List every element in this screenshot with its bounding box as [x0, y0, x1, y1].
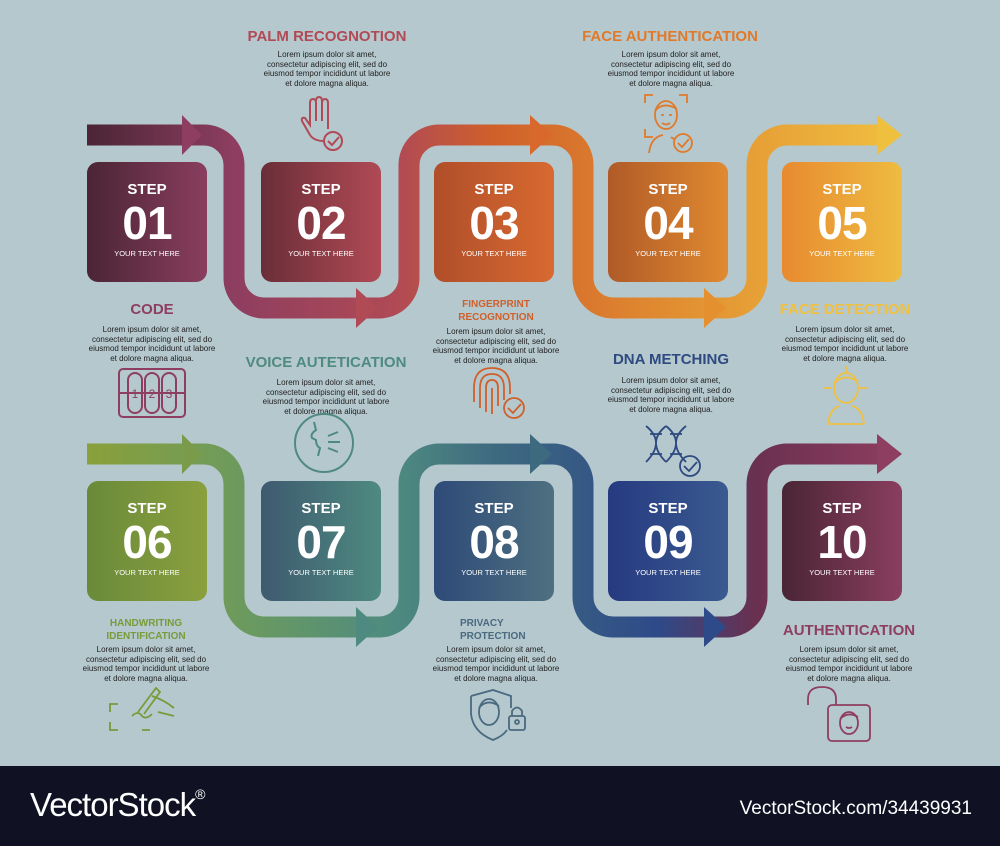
step 07: 07: [296, 516, 346, 568]
text: authentication: [786, 645, 912, 682]
icon: code lock: 1: [132, 387, 139, 401]
text: handwriting: [83, 645, 209, 682]
step 08: [434, 481, 554, 601]
step 04: YOUR TEXT HERE: [635, 249, 701, 258]
step 07: STEP: [301, 500, 341, 517]
text: privacy: eiusmod tempor incididunt ut labore: [433, 664, 559, 673]
icon: dna: [645, 425, 701, 477]
text: face detection: eiusmod tempor incididunt ut labore: [782, 344, 908, 353]
step 10: YOUR TEXT HERE: [809, 568, 875, 577]
step 05: [782, 162, 902, 282]
step 06: [87, 481, 207, 601]
heading: privacy protection: PROTECTION: [460, 631, 526, 642]
text: code: [89, 325, 215, 362]
text: face authentication: consectetur adipiscing elit, sed do: [611, 60, 731, 68]
step 04: STEP: [648, 181, 688, 198]
heading: fingerprint recognotion: RECOGNOTION: [458, 312, 534, 323]
arrow row 2: [87, 434, 902, 647]
step 07: YOUR TEXT HERE: [288, 568, 354, 577]
step 08: 08: [469, 516, 519, 568]
step 03: [434, 162, 554, 282]
step 10: 10: [817, 516, 867, 568]
text: privacy: et dolore magna aliqua.: [454, 674, 538, 682]
step 09: 09: [643, 516, 693, 568]
step 03: 03: [469, 197, 519, 249]
icon: code lock: 3: [166, 387, 173, 401]
step 05: STEP: [822, 181, 862, 198]
text: face detection: Lorem ipsum dolor sit amet,: [796, 325, 894, 334]
step 05: YOUR TEXT HERE: [809, 249, 875, 258]
step 08: STEP: [474, 500, 514, 517]
icon: unlock: [807, 686, 871, 742]
text: face authentication: eiusmod tempor incididunt ut labore: [608, 69, 734, 78]
heading: code: CODE: [130, 301, 174, 318]
text: palm: consectetur adipiscing elit, sed do: [267, 60, 387, 68]
step 10: STEP: [822, 500, 862, 517]
text: palm: et dolore magna aliqua.: [285, 78, 369, 88]
text: fingerprint: eiusmod tempor incididunt ut labore: [433, 346, 559, 355]
text: code: eiusmod tempor incididunt ut labore: [89, 344, 215, 353]
text: privacy: consectetur adipiscing elit, sed do: [436, 654, 556, 664]
text: palm: Lorem ipsum dolor sit amet,: [278, 50, 376, 59]
text: fingerprint: et dolore magna aliqua.: [454, 356, 538, 364]
step 03: STEP: [474, 181, 514, 198]
step 10: [782, 481, 902, 601]
text: code: Lorem ipsum dolor sit amet,: [103, 325, 201, 334]
step 04: [608, 162, 728, 282]
text: privacy: [433, 645, 559, 682]
step 09: [608, 481, 728, 601]
text: authentication: et dolore magna aliqua.: [807, 674, 891, 682]
text: authentication: consectetur adipiscing elit, sed do: [789, 654, 909, 664]
icon: face authentication: [644, 94, 693, 154]
heading: fingerprint recognotion: [458, 299, 534, 323]
arrow row 1: [87, 115, 902, 328]
text: face detection: [782, 325, 908, 362]
heading: face authentication: FACE AUTHENTICATION: [582, 28, 758, 45]
text: face detection: et dolore magna aliqua.: [803, 354, 887, 362]
text: face authentication: et dolore magna aliqua.: [629, 78, 713, 88]
heading: face detection: FACE DETECTION: [780, 301, 910, 318]
text: voice: consectetur adipiscing elit, sed do: [266, 388, 386, 396]
icon: voice: [294, 413, 354, 473]
heading: fingerprint recognotion: FINGERPRINT: [462, 299, 530, 310]
text: palm: eiusmod tempor incididunt ut labore: [264, 69, 390, 78]
text: code: et dolore magna aliqua.: [110, 354, 194, 362]
text: voice: [263, 378, 389, 416]
text: face detection: consectetur adipiscing elit, sed do: [785, 334, 905, 344]
footer brand: VectorStock®: [30, 786, 204, 823]
text: authentication: eiusmod tempor incididunt ut labore: [786, 664, 912, 673]
heading: dna metching: DNA METCHING: [613, 351, 729, 368]
text: dna: et dolore magna aliqua.: [629, 404, 713, 414]
step 08: YOUR TEXT HERE: [461, 568, 527, 577]
icon: code lock: 2: [149, 387, 156, 401]
step 02: YOUR TEXT HERE: [288, 249, 354, 258]
heading: voice autetication: VOICE AUTETICATION: [246, 354, 406, 371]
text: voice: eiusmod tempor incididunt ut labore: [263, 397, 389, 406]
icon: privacy: [470, 689, 526, 741]
step 01: YOUR TEXT HERE: [114, 249, 180, 258]
text: code: consectetur adipiscing elit, sed do: [92, 334, 212, 344]
step 04: 04: [643, 197, 693, 249]
heading: handwriting identification: [106, 618, 186, 642]
icon: fingerprint: [473, 367, 525, 419]
step 01: STEP: [127, 181, 167, 198]
footer url: VectorStock.com/34439931: [740, 798, 972, 819]
text: handwriting: Lorem ipsum dolor sit amet,: [97, 645, 195, 654]
text: voice: et dolore magna aliqua.: [284, 406, 368, 416]
text: voice: Lorem ipsum dolor sit amet,: [277, 378, 375, 387]
text: handwriting: et dolore magna aliqua.: [104, 674, 188, 682]
heading: privacy protection: [460, 618, 526, 642]
step 05: 05: [817, 197, 867, 249]
heading: privacy protection: PRIVACY: [460, 618, 504, 629]
footer bar: [0, 766, 1000, 846]
text: privacy: Lorem ipsum dolor sit amet,: [447, 645, 545, 654]
heading: handwriting identification: HANDWRITING: [110, 618, 182, 629]
text: dna: [608, 376, 734, 414]
step 07: [261, 481, 381, 601]
step 06: YOUR TEXT HERE: [114, 568, 180, 577]
step 02: 02: [296, 197, 346, 249]
icon: face detection: [824, 366, 868, 425]
step 06: 06: [122, 516, 172, 568]
text: dna: eiusmod tempor incididunt ut labore: [608, 395, 734, 404]
text: palm: [264, 50, 390, 88]
step 01: [87, 162, 207, 282]
text: face authentication: Lorem ipsum dolor sit amet,: [622, 50, 720, 59]
heading: authentication: AUTHENTICATION: [783, 622, 915, 639]
step 09: STEP: [648, 500, 688, 517]
step 06: STEP: [127, 500, 167, 517]
heading: palm recognotion: PALM RECOGNOTION: [248, 28, 406, 45]
text: authentication: Lorem ipsum dolor sit amet,: [800, 645, 898, 654]
step 03: YOUR TEXT HERE: [461, 249, 527, 258]
step 02: STEP: [301, 181, 341, 198]
icon: code lock: [118, 368, 186, 418]
text: fingerprint: [433, 327, 559, 364]
icon: handwriting: [109, 686, 174, 731]
heading: handwriting identification: IDENTIFICATION: [106, 631, 186, 642]
text: fingerprint: Lorem ipsum dolor sit amet,: [447, 327, 545, 336]
icon: palm: [300, 96, 343, 151]
text: face authentication: [608, 50, 734, 88]
step 09: YOUR TEXT HERE: [635, 568, 701, 577]
text: dna: Lorem ipsum dolor sit amet,: [622, 376, 720, 385]
step 02: [261, 162, 381, 282]
text: dna: consectetur adipiscing elit, sed do: [611, 386, 731, 394]
step 01: 01: [122, 197, 172, 249]
text: handwriting: eiusmod tempor incididunt ut labore: [83, 664, 209, 673]
text: fingerprint: consectetur adipiscing elit, sed do: [436, 336, 556, 346]
text: handwriting: consectetur adipiscing elit, sed do: [86, 654, 206, 664]
